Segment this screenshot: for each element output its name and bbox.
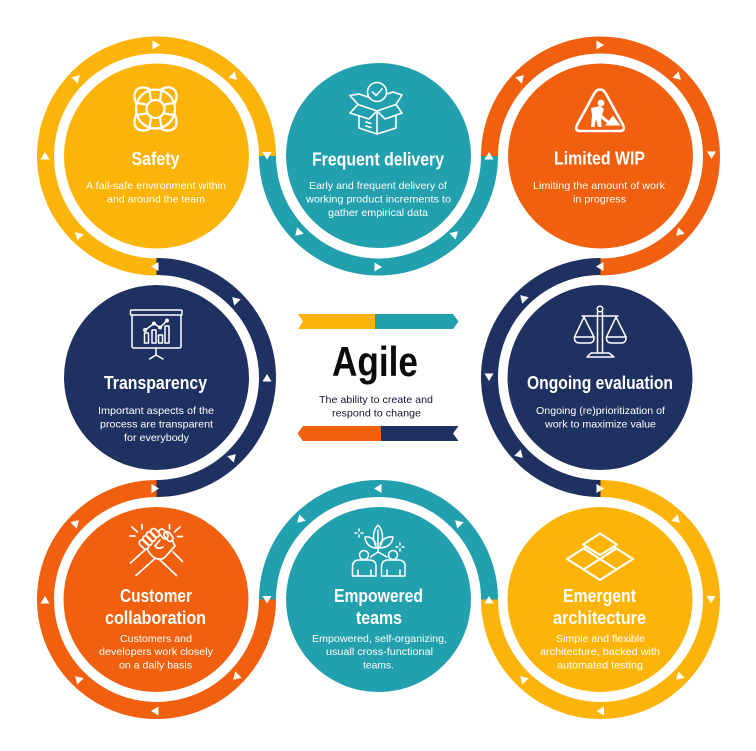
text: Safety description [86,181,226,206]
panel: Transparency [64,266,272,488]
text: Agile subtitle: The ability to create and [319,395,433,406]
text: Customer collaboration description: developers work closely [99,647,214,658]
text: Transparency description: process are transparent [100,420,213,430]
heading: Transparency: Transparency [104,373,207,393]
heading: Empowered teams: Empowered [334,586,423,606]
text: Ongoing evaluation description: work to maximize value [544,420,656,430]
icon: life buoy [134,87,176,131]
icon: presentation board with chart [130,310,182,359]
heading: Limited WIP: Limited WIP [554,148,645,168]
panel: Frequent delivery [268,63,490,272]
text: Safety description: and around the team [107,194,205,206]
text: Transparency description [98,406,214,444]
icon: worker warning sign [576,90,624,131]
text: Ongoing evaluation description [536,406,665,430]
text: Ongoing evaluation description: Ongoing (re)prioritization of [536,406,665,417]
text: Safety description: A fail-safe environment within [86,181,226,192]
text: Emergent architecture description: Simple and flexible [556,634,645,645]
center: Agile title block [298,314,458,441]
banner: top ribbon [298,314,458,329]
panel: Emergent architecture [490,488,716,716]
text: Empowered teams description: Empowered, self-organizing, [312,634,447,645]
panel: Customer collaboration [40,488,268,716]
panel: Limited WIP [490,40,716,267]
title: Agile: Agile [332,338,418,385]
text: Frequent delivery description: Early and frequent delivery of [309,181,447,192]
text: Transparency description: for everybody [124,433,190,444]
text: Emergent architecture description [540,634,660,672]
text: Transparency description: Important aspects of the [98,406,214,417]
heading: Emergent architecture [553,586,646,628]
arrows: junction markers between rings [151,152,604,604]
text: Empowered teams description [312,634,447,672]
heading: Empowered teams [334,586,423,628]
text: Customer collaboration description: on a daily basis [119,660,192,672]
banner: bottom ribbon [298,426,458,441]
text: Limited WIP description: Limiting the amount of work [533,181,666,192]
heading: Emergent architecture: architecture [553,608,646,628]
text: Customer collaboration description [99,634,214,672]
icon: balance scale [574,306,626,357]
heading: Empowered teams: teams [356,608,402,628]
heading: Emergent architecture: Emergent [563,586,636,606]
text: Emergent architecture description: architecture, backed with [540,647,660,658]
heading: Ongoing evaluation: Ongoing evaluation [527,373,673,393]
panel: Safety [40,40,268,267]
text: Agile subtitle [319,395,433,420]
text: Customer collaboration description: Customers and [120,634,192,645]
panel: Empowered teams [268,484,490,692]
heading: Safety: Safety [132,149,180,169]
heading: Customer collaboration: collaboration [105,608,206,628]
text: Frequent delivery description: gather empirical data [328,208,428,219]
text: Frequent delivery description [305,181,451,219]
heading: Frequent delivery: Frequent delivery [312,150,444,170]
text: Empowered teams description: usuall cross-functional [326,647,433,658]
text: Limited WIP description [533,181,666,206]
text: Limited WIP description: in progress [573,194,626,206]
text: Emergent architecture description: automated testing [557,660,643,672]
text: Agile subtitle: respond to change [332,408,421,420]
icon: two people with plant [352,525,405,576]
text: Empowered teams description: teams. [363,660,394,672]
icon: open box with check [350,82,402,134]
panel: Ongoing evaluation [484,266,692,488]
icon: clasped hands [130,524,182,576]
heading: Customer collaboration [105,586,206,628]
text: Frequent delivery description: working product increments to [305,194,451,206]
heading: Customer collaboration: Customer [120,586,192,606]
icon: stacked tiles [567,534,633,580]
